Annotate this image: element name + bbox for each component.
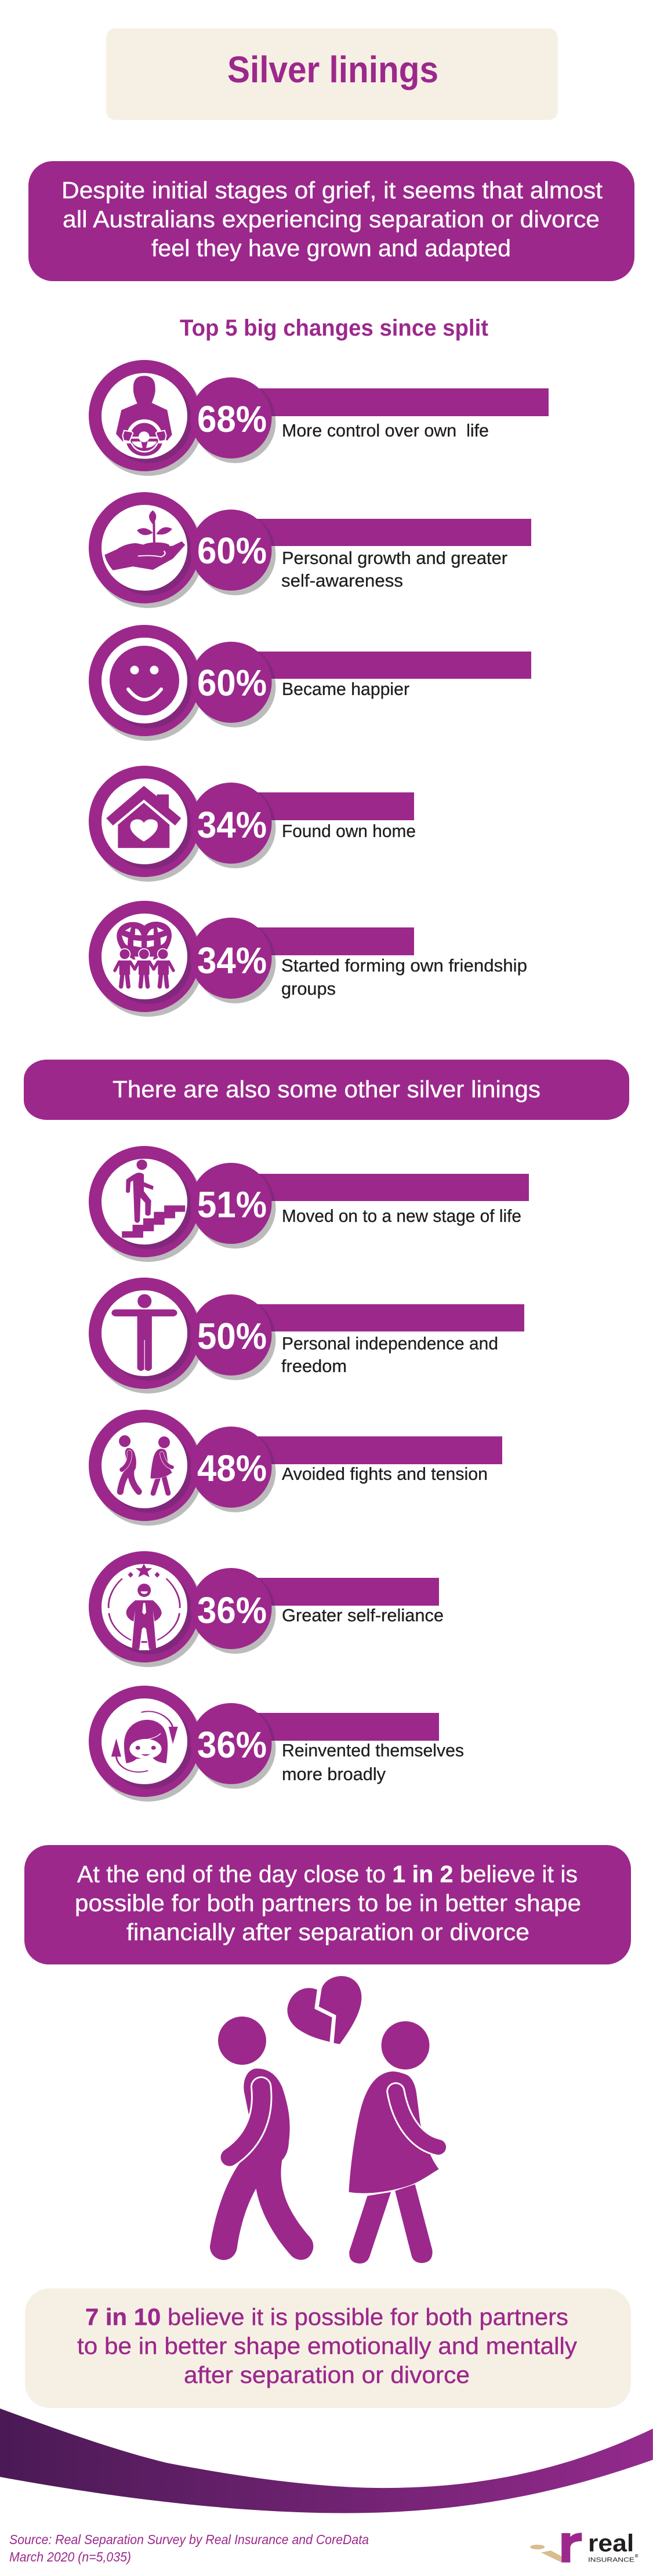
icon: person with arms outstretched xyxy=(111,1294,177,1371)
label: Became happier xyxy=(282,679,409,699)
row: 51% new stage of life xyxy=(89,1146,529,1262)
row: 48% avoided fights xyxy=(89,1410,502,1526)
row: 68% more control xyxy=(89,360,549,476)
intro text xyxy=(61,177,603,261)
intro text: feel they have grown and adapted xyxy=(151,235,511,261)
callout text: 7 in 10 believe it is possible for both partners xyxy=(85,2304,568,2330)
percentage: 51% xyxy=(197,1184,267,1225)
label xyxy=(281,955,527,999)
label xyxy=(281,1333,498,1376)
row: 34% friendship groups xyxy=(89,901,527,1017)
label: Moved on to a new stage of life xyxy=(282,1206,521,1226)
intro text: Despite initial stages of grief, it seems that almost xyxy=(61,177,603,203)
logo: Real Insurance xyxy=(530,2530,639,2563)
label xyxy=(282,1740,464,1784)
banner text: There are also some other silver linings xyxy=(113,1076,540,1103)
percentage: 36% xyxy=(197,1589,267,1631)
row: 34% found own home xyxy=(89,766,416,882)
label: Found own home xyxy=(282,821,416,841)
percentage: 34% xyxy=(197,940,267,981)
label: self-awareness xyxy=(281,570,403,591)
callout: 7 in 10 emotionally xyxy=(25,2288,631,2408)
row: 60% became happier xyxy=(89,625,531,741)
source note: March 2020 (n=5,035) xyxy=(9,2549,131,2564)
callout text: after separation or divorce xyxy=(184,2362,470,2388)
intro panel xyxy=(28,161,634,281)
banner: other silver linings xyxy=(24,1060,629,1120)
label: Avoided fights and tension xyxy=(282,1464,488,1484)
percentage: 68% xyxy=(197,398,267,440)
label: freedom xyxy=(281,1356,347,1376)
icon: house with heart xyxy=(106,786,181,848)
callout text xyxy=(75,1861,581,1945)
icon: couple walking apart xyxy=(117,1435,172,1496)
figure: woman xyxy=(349,2021,439,2264)
callout text: At the end of the day close to 1 in 2 believe it is xyxy=(77,1861,578,1887)
label: Greater self-reliance xyxy=(282,1605,444,1625)
decorative swoosh xyxy=(0,2408,653,2513)
row: 36% reinvented xyxy=(89,1686,464,1802)
icon: plant in hand xyxy=(104,510,185,570)
callout text: possible for both partners to be in better shape xyxy=(75,1890,581,1916)
source note xyxy=(9,2532,369,2564)
icon: driver at steering wheel xyxy=(116,376,172,456)
callout text: financially after separation or divorce xyxy=(126,1919,529,1945)
label: more broadly xyxy=(282,1764,386,1784)
figure: man xyxy=(210,2017,313,2260)
label: More control over own life xyxy=(282,420,489,441)
label: groups xyxy=(281,978,336,999)
percentage: 34% xyxy=(197,804,267,846)
callout: 1 in 2 financially xyxy=(24,1845,631,1964)
icon: woman's face with circular arrows xyxy=(111,1711,178,1772)
icon: broken heart xyxy=(287,1976,361,2044)
percentage: 50% xyxy=(197,1315,267,1357)
row: 60% personal growth xyxy=(89,492,531,608)
label: Personal independence and xyxy=(282,1333,498,1354)
source note: Source: Real Separation Survey by Real Insurance and CoreData xyxy=(9,2532,369,2547)
percentage: 36% xyxy=(197,1724,267,1766)
icon: person climbing stairs xyxy=(122,1159,185,1238)
icon: confident person with star xyxy=(108,1564,180,1650)
label xyxy=(281,548,507,591)
icon: smiley face xyxy=(110,646,179,715)
row: 50% independence xyxy=(89,1278,524,1393)
row: 36% self-reliance xyxy=(89,1551,444,1667)
icon: people under heart globe xyxy=(115,922,173,987)
heading: top 5: Top 5 big changes since split xyxy=(180,315,488,341)
logo: Real Insurance: ® xyxy=(635,2553,639,2559)
illustration: couple and broken heart xyxy=(210,1976,439,2264)
label: Started forming own friendship xyxy=(281,955,527,976)
title: Silver linings xyxy=(227,49,438,90)
label: Reinvented themselves xyxy=(282,1740,464,1760)
intro text: all Australians experiencing separation or divorce xyxy=(63,206,600,232)
title panel xyxy=(106,28,558,120)
label: Personal growth and greater xyxy=(282,548,507,568)
callout text: to be in better shape emotionally and mentally xyxy=(77,2333,578,2359)
callout text xyxy=(77,2304,578,2388)
percentage: 48% xyxy=(197,1447,267,1489)
logo: Real Insurance: INSURANCE xyxy=(588,2556,634,2563)
logo: Real Insurance: real xyxy=(588,2530,634,2557)
percentage: 60% xyxy=(197,662,267,704)
percentage: 60% xyxy=(197,530,267,572)
